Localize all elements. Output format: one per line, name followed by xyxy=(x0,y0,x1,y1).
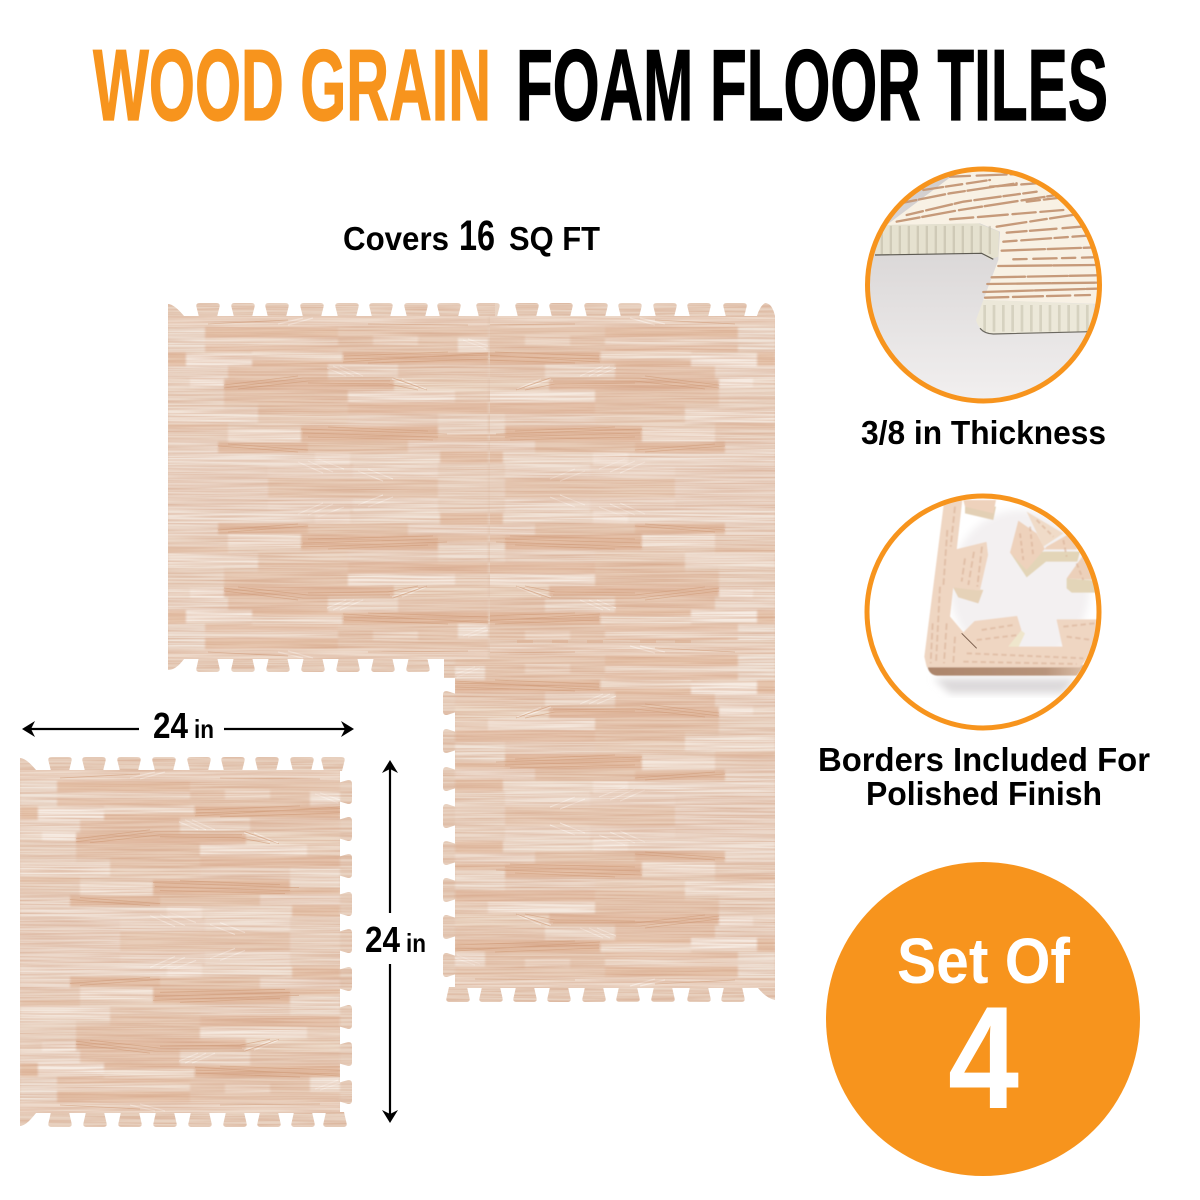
title: WOOD GRAIN xyxy=(93,30,491,142)
coverage label xyxy=(343,212,600,260)
coverage label: SQ FT xyxy=(509,220,600,257)
border caption: Polished Finish xyxy=(866,775,1102,812)
width dimension arrow: 24 xyxy=(153,705,188,746)
border caption xyxy=(818,741,1150,812)
border caption: Borders Included For xyxy=(818,741,1150,778)
thickness detail photo xyxy=(865,166,1102,404)
height dimension arrow: in xyxy=(406,928,426,958)
width dimension arrow: in xyxy=(194,714,214,744)
set of 4 badge: 4 xyxy=(948,976,1019,1139)
set of 4 badge xyxy=(826,862,1140,1176)
height dimension arrow: 24 xyxy=(365,919,400,960)
coverage label: 16 xyxy=(459,212,495,260)
single foam tile xyxy=(4,752,360,1132)
height dimension arrow xyxy=(365,760,426,1123)
border detail photo xyxy=(864,494,1102,730)
width dimension arrow xyxy=(22,705,354,746)
assembled three-tile foam floor xyxy=(152,300,791,1006)
set of 4 badge: Set Of xyxy=(897,925,1071,997)
thickness caption: 3/8 in Thickness xyxy=(861,414,1106,451)
title xyxy=(93,30,1108,142)
coverage label: Covers xyxy=(343,220,449,257)
